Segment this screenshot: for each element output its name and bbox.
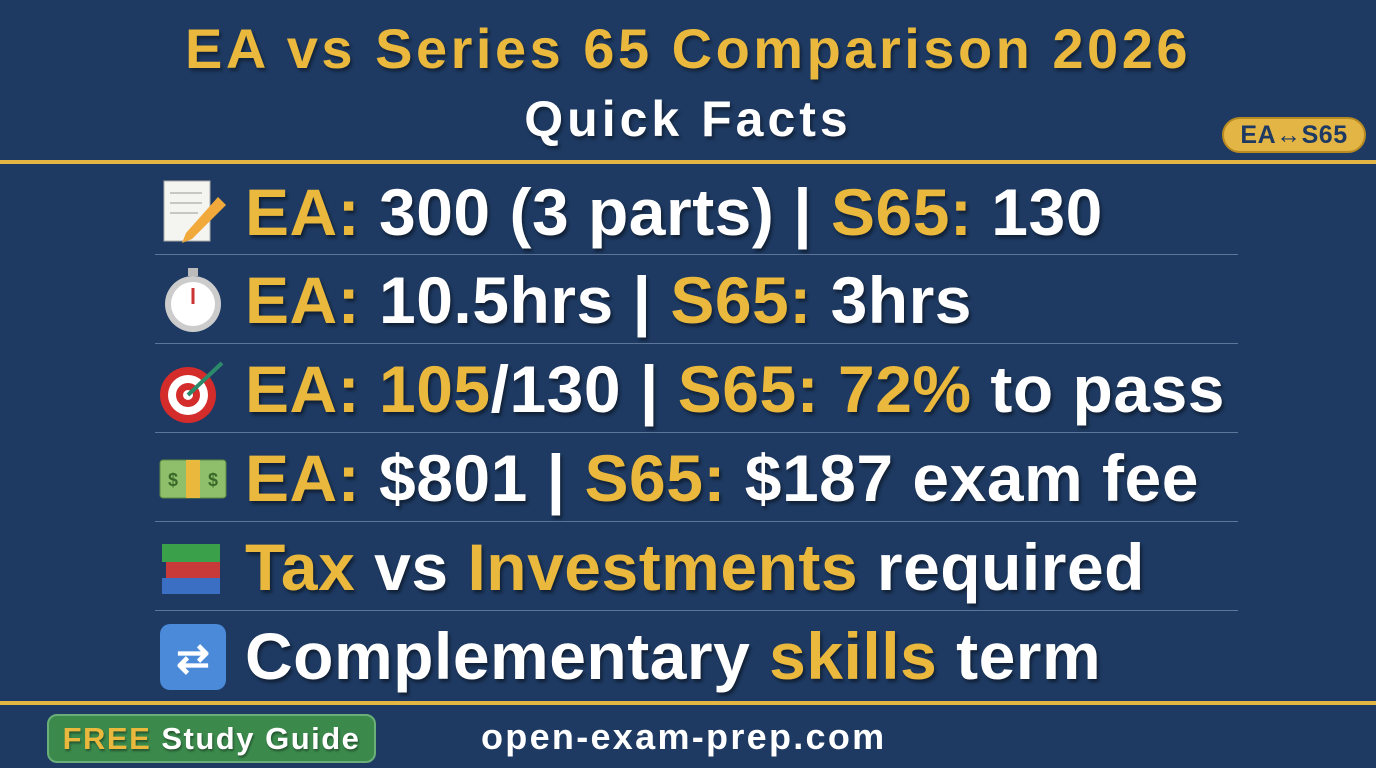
- icon: memo: [164, 180, 226, 243]
- badge: EA S65: EA↔S65: [1240, 121, 1348, 149]
- icon: repeat: ⇄: [176, 637, 210, 681]
- icon: money: $: [168, 470, 178, 490]
- row 1: EA: 300 (3 parts) | S65: 130: [245, 175, 1103, 249]
- row 3: EA: 105/130 | S65: 72% to pass: [245, 352, 1225, 426]
- row 6: Complementary skills term: [245, 619, 1101, 693]
- button: free study guide: FREE Study Guide: [63, 721, 360, 756]
- icon: stopwatch: [165, 268, 221, 332]
- icon: money: $: [208, 470, 218, 490]
- button: free study guide: [47, 714, 376, 763]
- icon: books: [162, 544, 220, 594]
- icon: money: [160, 460, 226, 498]
- icon: target: [160, 362, 224, 423]
- row 2: EA: 10.5hrs | S65: 3hrs: [245, 263, 972, 337]
- subtitle: Quick Facts: [524, 91, 852, 147]
- icon: repeat: [160, 624, 226, 690]
- title: EA vs Series 65 Comparison 2026: [185, 17, 1191, 80]
- row 5: Tax vs Investments required: [245, 530, 1145, 604]
- badge: EA S65: [1222, 117, 1366, 153]
- row 4: EA: $801 | S65: $187 exam fee: [245, 441, 1199, 515]
- footer url: open-exam-prep.com: [481, 716, 886, 757]
